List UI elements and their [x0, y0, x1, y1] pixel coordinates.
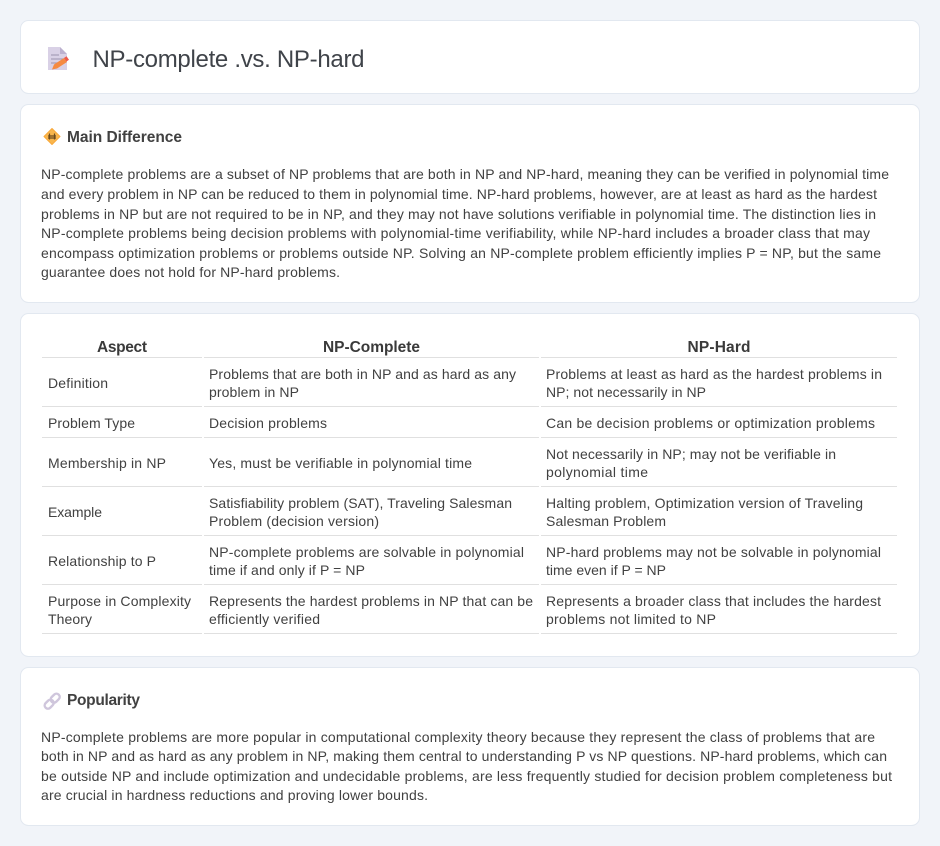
- table row: membership in NP: polynomial time: [546, 464, 648, 480]
- icon: document with pencil: [48, 47, 69, 70]
- text block: popularity paragraph: both in NP and as hard as any problem in NP, making them central to understanding P vs NP questions. NP-hard problems, which can: [41, 748, 887, 764]
- table row: purpose in complexity theory: Theory: [48, 611, 92, 627]
- text block: main difference paragraph: NP-complete problems being decision problems with polynomial-time verifiability, while NP-hard includes a broader class that may: [41, 225, 870, 241]
- text block: main difference paragraph: problems in NP but are not required to be in NP, and they may not have solutions verifiable in polynomial time. The distinction lies in: [41, 206, 876, 222]
- table row: relationship to P: [42, 544, 897, 585]
- heading: main difference: Main Difference: [67, 129, 182, 146]
- text block: main difference paragraph: and every problem in NP can be reduced to them in polynomial time. NP-hard problems, however, are at least as hard as the hardest: [41, 186, 877, 202]
- table row: problem type: [42, 415, 897, 438]
- table row: problem type: Problem Type: [48, 415, 135, 431]
- text block: main difference paragraph: guarantee does not hold for NP-hard problems.: [41, 264, 340, 280]
- table row: membership in NP: Membership in NP: [48, 455, 166, 471]
- text block: popularity paragraph: are crucial in hardness reductions and proving lower bounds.: [41, 787, 428, 803]
- table row: example: Problem (decision version): [209, 513, 379, 529]
- table row: relationship to P: time even if P = NP: [546, 562, 666, 578]
- table row: definition: problem in NP: [209, 384, 299, 400]
- table row: membership in NP: Not necessarily in NP; may not be verifiable in: [546, 446, 836, 462]
- table row: problem type: Can be decision problems or optimization problems: [546, 415, 875, 431]
- text block: popularity paragraph: [41, 729, 892, 803]
- heading: popularity: Popularity: [67, 692, 140, 709]
- table row: definition: Definition: [48, 375, 108, 391]
- table header: [42, 339, 897, 358]
- table header: NP-Hard: [688, 339, 750, 356]
- table row: example: Salesman Problem: [546, 513, 666, 529]
- panel: title header: [20, 20, 920, 94]
- table row: relationship to P: Relationship to P: [48, 553, 156, 569]
- text block: popularity paragraph: NP-complete problems are more popular in computational complexity theory because they represent the class of problems that are: [41, 729, 875, 745]
- table row: relationship to P: time if and only if P = NP: [209, 562, 365, 578]
- title: NP-complete .vs. NP-hard: [92, 46, 364, 73]
- table row: example: Example: [48, 504, 102, 520]
- table row: definition: NP; not necessarily in NP: [546, 384, 706, 400]
- table row: definition: Problems that are both in NP and as hard as any: [209, 366, 516, 382]
- table row: purpose in complexity theory: Represents a broader class that includes the hardest: [546, 593, 881, 609]
- table header: Aspect: [97, 339, 147, 356]
- table row: purpose in complexity theory: efficiently verified: [209, 611, 320, 627]
- table row: definition: Problems at least as hard as the hardest problems in: [546, 366, 882, 382]
- table row: purpose in complexity theory: Represents the hardest problems in NP that can be: [209, 593, 533, 609]
- table row: membership in NP: [42, 446, 897, 487]
- table row: purpose in complexity theory: Purpose in Complexity: [48, 593, 191, 609]
- panel: comparison table: [20, 314, 920, 656]
- text block: main difference paragraph: [41, 166, 889, 280]
- table row: example: Satisfiability problem (SAT), Traveling Salesman: [209, 495, 512, 511]
- icon: chain link: [43, 692, 61, 710]
- table row: example: Halting problem, Optimization version of Traveling: [546, 495, 863, 511]
- panel: popularity: [20, 668, 920, 826]
- table row: membership in NP: Yes, must be verifiable in polynomial time: [209, 455, 472, 471]
- table row: purpose in complexity theory: [42, 593, 897, 634]
- table header: NP-Complete: [323, 339, 420, 356]
- text block: popularity paragraph: be outside NP and include optimization and undecidable problems, are less frequently studied for decision problem completeness but: [41, 768, 892, 784]
- table row: relationship to P: NP-complete problems are solvable in polynomial: [209, 544, 524, 560]
- icon: warning diamond: [44, 128, 60, 144]
- table row: example: [42, 495, 897, 536]
- table row: purpose in complexity theory: problems not limited to NP: [546, 611, 716, 627]
- table row: definition: [42, 366, 897, 407]
- table row: relationship to P: NP-hard problems may not be solvable in polynomial: [546, 544, 881, 560]
- panel: main difference: [20, 104, 920, 302]
- table row: problem type: Decision problems: [209, 415, 327, 431]
- text block: main difference paragraph: NP-complete problems are a subset of NP problems that are both in NP and NP-hard, meaning they can be verified in polynomial time: [41, 166, 889, 182]
- text block: main difference paragraph: encompass optimization problems or problems outside NP. Solving an NP-complete problem efficiently implies P = NP, but the same: [41, 245, 881, 261]
